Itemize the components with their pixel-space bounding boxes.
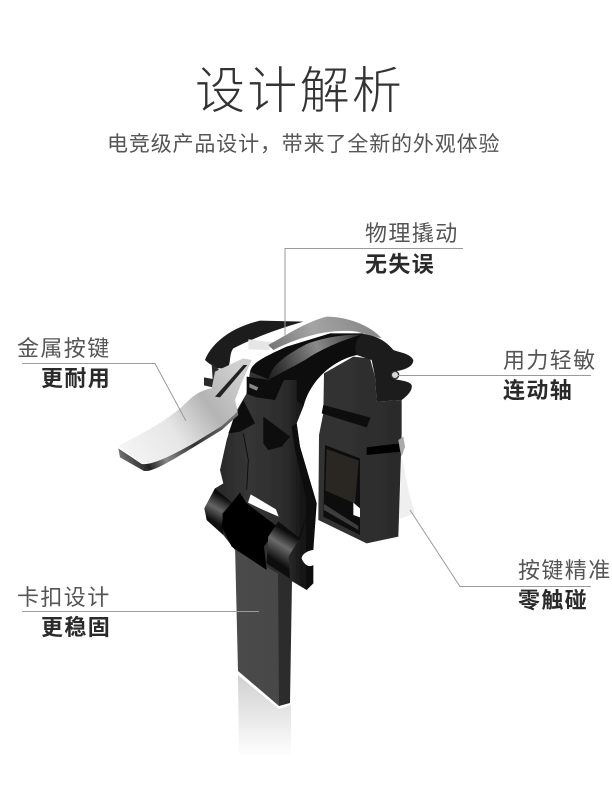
hinge barrel black	[222, 493, 277, 570]
callout: 物理撬动	[285, 221, 463, 335]
callout: 用力轻敏: 连动轴	[503, 378, 573, 403]
front arm shine	[268, 335, 362, 380]
centre shard	[263, 417, 290, 450]
subtitle: 电竞级产品设计，带来了全新的外观体验	[107, 133, 500, 156]
callout: 卡扣设计	[17, 585, 259, 640]
hinge barrel right	[267, 507, 310, 578]
callout: 物理撬动: 无失误	[365, 252, 435, 277]
rear metal highlight	[248, 339, 277, 350]
callout: 物理撬动: 物理撬动	[365, 221, 459, 246]
callout: 卡扣设计: 卡扣设计	[17, 585, 111, 610]
callout: 金属按键	[17, 336, 186, 421]
front arm	[250, 333, 363, 407]
hinge mechanics	[247, 377, 284, 400]
hinge barrel left	[205, 488, 232, 535]
top metal band	[268, 317, 382, 350]
metal button lever	[118, 358, 252, 471]
strap	[235, 545, 292, 706]
strap reflection	[238, 675, 291, 757]
arch	[287, 333, 413, 407]
callout: 卡扣设计: 更稳固	[41, 615, 111, 640]
left shard	[228, 400, 255, 433]
right edge bevel	[292, 423, 317, 508]
product: trigger clip	[118, 317, 415, 590]
callout: 按键精准	[410, 510, 612, 613]
right housing block	[318, 357, 405, 543]
axle pin	[391, 371, 399, 379]
callout: 金属按键: 金属按键	[17, 336, 111, 361]
callout: 用力轻敏	[398, 348, 597, 403]
callout: 金属按键: 更耐用	[41, 366, 111, 391]
body seam	[243, 433, 248, 490]
rear hook	[205, 321, 303, 368]
callout: 按键精准: 按键精准	[518, 558, 612, 583]
slot	[248, 494, 279, 517]
rear bracket	[204, 363, 220, 387]
front body	[204, 333, 363, 590]
lever slot	[215, 365, 247, 397]
callout: 用力轻敏: 用力轻敏	[503, 348, 597, 373]
title: 设计解析	[195, 63, 404, 119]
right white reflection	[399, 457, 415, 519]
callout: 按键精准: 零触碰	[518, 588, 588, 613]
